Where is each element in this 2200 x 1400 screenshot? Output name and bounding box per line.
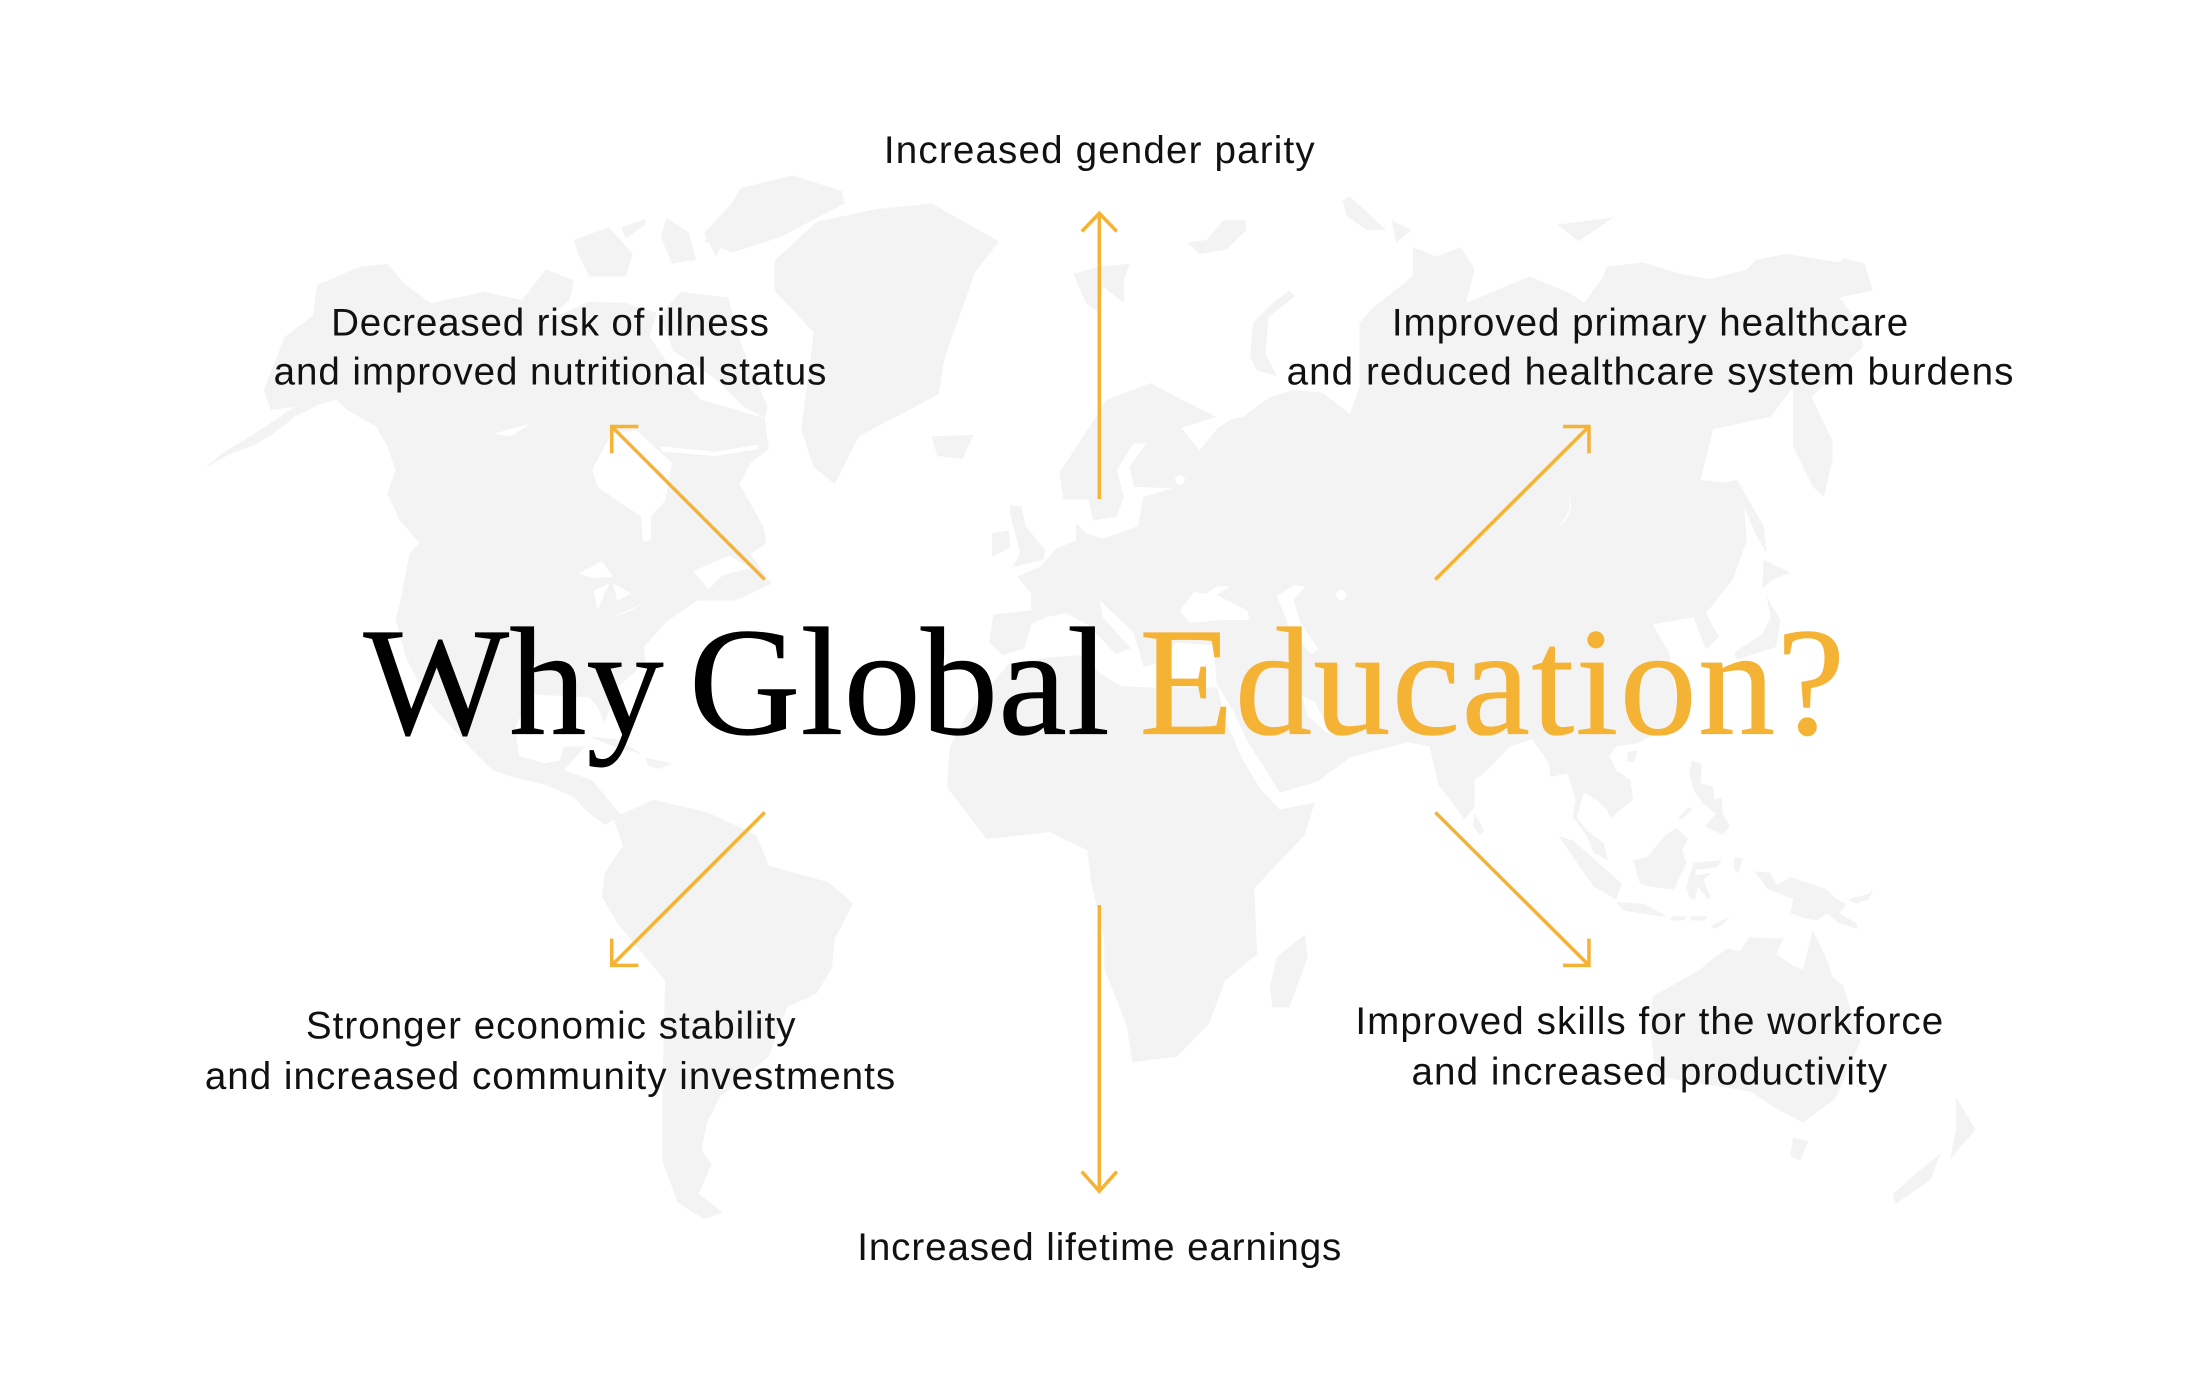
Sri Lanka <box>1473 814 1484 835</box>
title: Education? <box>1139 596 1845 767</box>
label: lifetime earnings: Increased lifetime earnings <box>857 1225 1341 1268</box>
arrow: upper right to healthcare <box>1435 427 1589 579</box>
Britain and Ireland <box>1010 505 1045 567</box>
New Zealand <box>1950 1097 1976 1159</box>
Eurasia <box>989 247 1873 860</box>
New Guinea and New Britain <box>1754 871 1858 929</box>
label: healthcare: Improved primary healthcare <box>1392 300 1908 344</box>
Iceland <box>932 435 974 459</box>
Indonesia and Philippines <box>1633 828 1688 890</box>
arrow: down to lifetime earnings <box>1082 905 1117 1191</box>
Svalbard and Arctic Russia islands <box>1073 264 1129 313</box>
arrow: up to gender parity <box>1082 213 1117 499</box>
label: workforce skills: and increased productivity <box>1411 1050 1887 1093</box>
Australia <box>1650 930 1860 1122</box>
world map background <box>203 175 1976 1219</box>
title: Global <box>689 596 1110 767</box>
label: illness and nutrition <box>274 300 826 393</box>
label: illness and nutrition: Decreased risk of illness <box>331 300 769 344</box>
Caribbean islands <box>589 737 641 753</box>
title <box>363 596 1845 767</box>
label: healthcare: and reduced healthcare system burdens <box>1287 349 2013 393</box>
Greenland <box>774 203 999 484</box>
arrow: lower left to economic stability <box>612 812 765 965</box>
label: economic stability <box>205 1003 895 1097</box>
label: economic stability: and increased community investments <box>205 1054 895 1097</box>
label: workforce skills: Improved skills for the workforce <box>1355 999 1943 1042</box>
label: healthcare <box>1287 300 2013 393</box>
title: Why <box>363 596 664 767</box>
label: illness and nutrition: and improved nutritional status <box>274 349 826 393</box>
arrow: lower right to workforce <box>1435 812 1589 965</box>
Hainan <box>1628 751 1637 762</box>
label: workforce skills <box>1355 999 1943 1093</box>
label: gender parity: Increased gender parity <box>884 128 1315 171</box>
arrow: upper left to illness <box>612 427 765 579</box>
Madagascar <box>1270 934 1308 1007</box>
label: economic stability: Stronger economic stability <box>306 1003 796 1047</box>
South America <box>602 800 853 1219</box>
North America <box>203 264 772 825</box>
Africa <box>947 655 1315 1062</box>
Arctic Canada islands <box>704 175 845 253</box>
map water bodies <box>494 424 1571 737</box>
Japan <box>1762 560 1790 589</box>
